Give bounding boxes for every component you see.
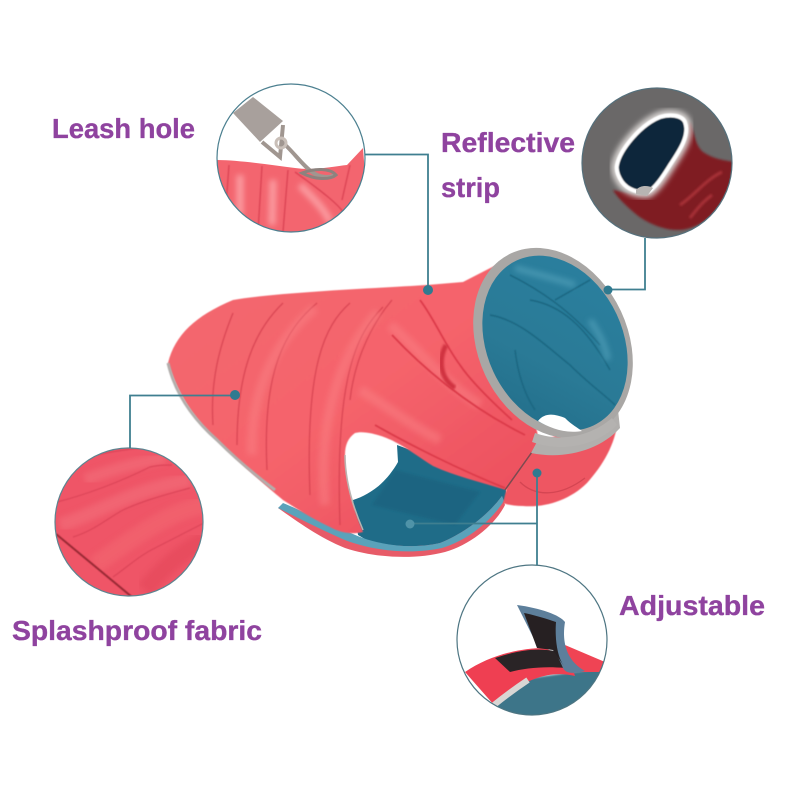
fabric seams [57,448,204,577]
jacket body [168,262,540,533]
belly flap [278,496,505,557]
dog jacket product illustration [168,222,663,557]
puffer fabric bands [60,480,190,525]
belly pad stitching [372,470,480,525]
leash strap [233,97,283,142]
connector: adjustable [406,468,542,565]
jacket highlights [252,308,480,505]
red strap [465,648,575,705]
adjustable strap [503,420,618,506]
armhole trim [345,455,363,530]
label: reflective strip: Reflective [441,127,575,158]
leash clip [262,125,335,177]
callout circle: reflective strip [582,88,733,238]
connector: splashproof fabric [130,390,240,448]
connector: leash hole [365,154,433,295]
callout circle: splashproof fabric [54,447,205,597]
neck lining [443,222,663,464]
jacket detail [218,148,364,232]
label: adjustable: Adjustable [619,590,765,621]
connector: reflective strip [604,238,645,294]
lining leg opening [538,415,582,432]
strap reflective edge [531,410,620,455]
reflective trim on back edge [168,363,275,490]
collar front strip [532,418,617,447]
raised flap [517,605,585,673]
dark red collar [613,122,733,230]
chest gathered folds [375,300,525,488]
velcro patch [495,650,565,672]
teal lining [498,672,599,714]
jacket underside lining [353,445,507,552]
lining quilting [490,275,615,410]
callout circle: leash hole [215,84,370,240]
callout circle: adjustable strap [457,565,607,720]
quilting seams [212,300,392,525]
glowing reflective ring [617,115,686,192]
label: reflective strip: strip [441,172,500,203]
label: splashproof fabric: Splashproof fabric [12,615,262,646]
label: reflective strip [441,127,575,203]
label: leash hole: Leash hole [52,113,195,144]
